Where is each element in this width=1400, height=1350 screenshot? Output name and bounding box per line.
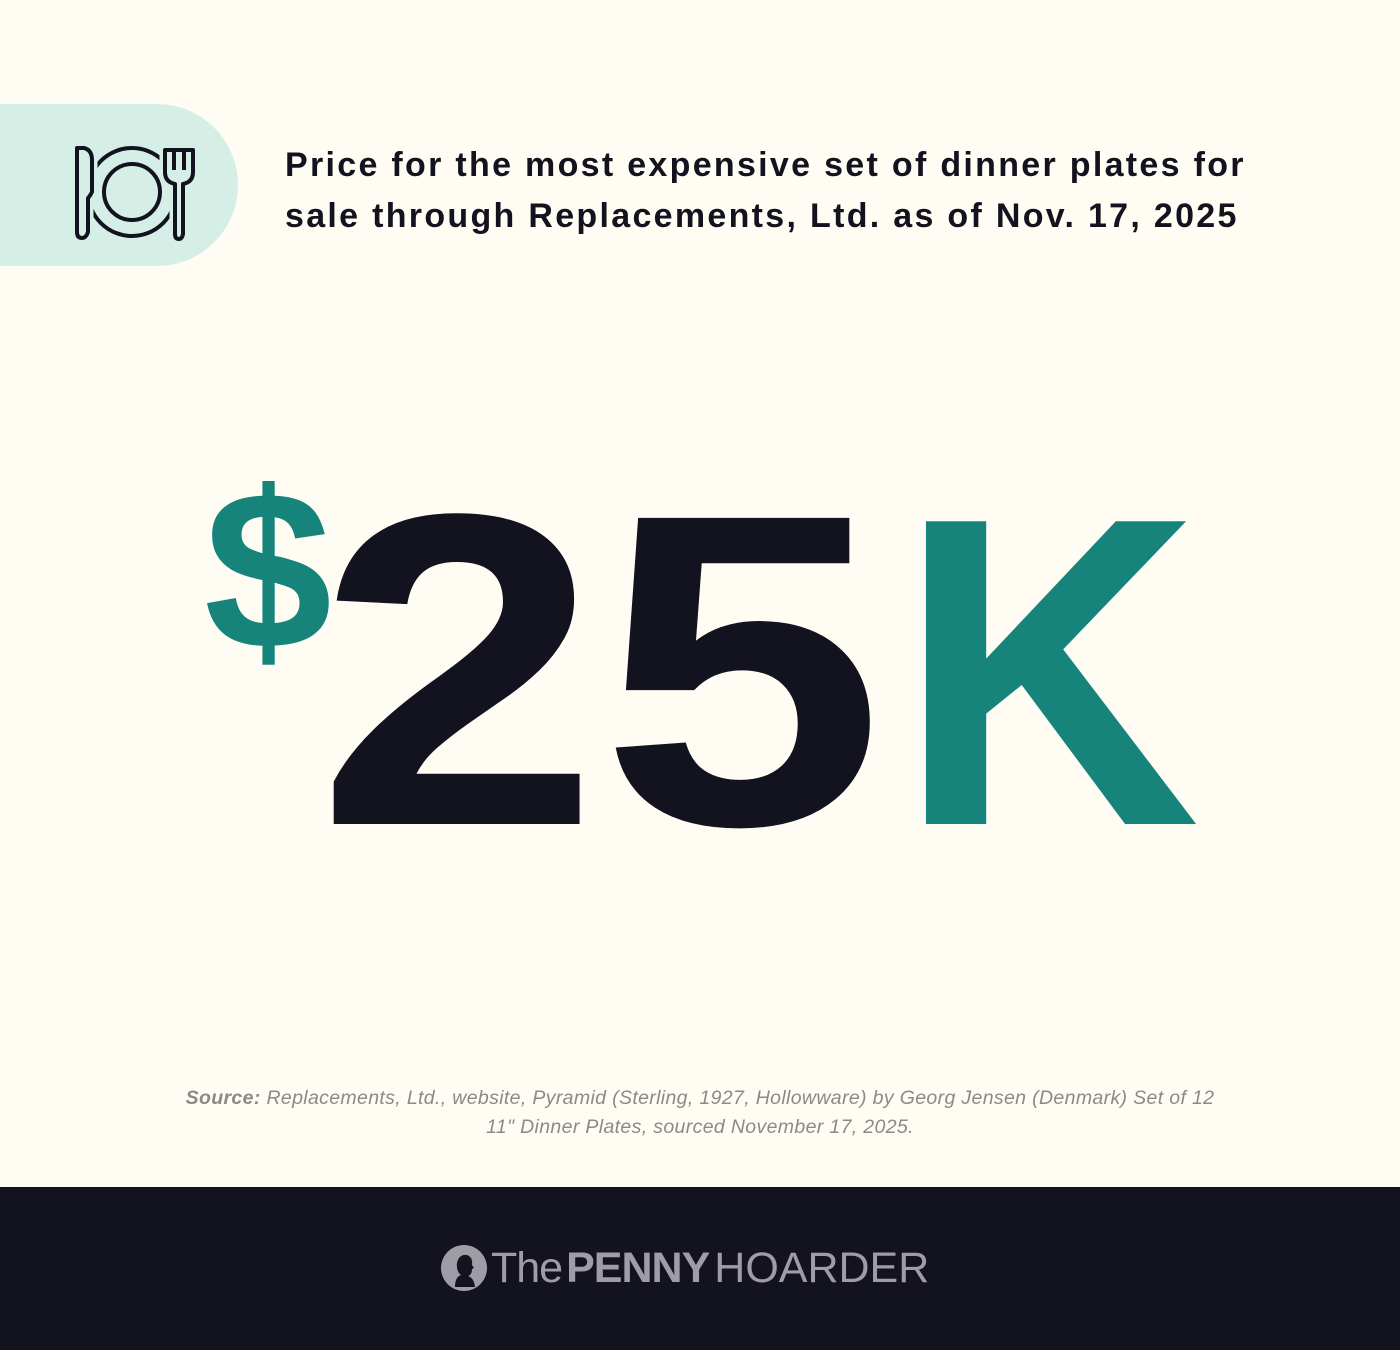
logo: The Penny Hoarder: The — [491, 1244, 562, 1292]
source note: 11" Dinner Plates, sourced November 17, 2025. — [486, 1116, 914, 1138]
footer — [0, 1187, 1400, 1350]
icon: plate with knife and fork — [75, 146, 195, 241]
logo: The Penny Hoarder — [441, 1244, 929, 1292]
source note: Source: Replacements, Ltd., website, Pyramid (Sterling, 1927, Hollowware) by Georg Jensen (Denmark) Set of 12 — [186, 1087, 1214, 1109]
dollar sign: $ — [204, 444, 332, 696]
source note — [186, 1087, 1214, 1138]
icon: silhouette circle — [441, 1245, 487, 1291]
title: Price for the most expensive set of dinner plates for sale through Replacements, Ltd. as of Nov. 17, 2025 — [285, 146, 1246, 235]
big number: $25K — [204, 422, 1200, 900]
icon panel: teal pill with dinner plate icon — [0, 104, 238, 266]
logo: The Penny Hoarder: PENNY — [566, 1244, 709, 1292]
logo: The Penny Hoarder: HOARDER — [714, 1244, 929, 1292]
